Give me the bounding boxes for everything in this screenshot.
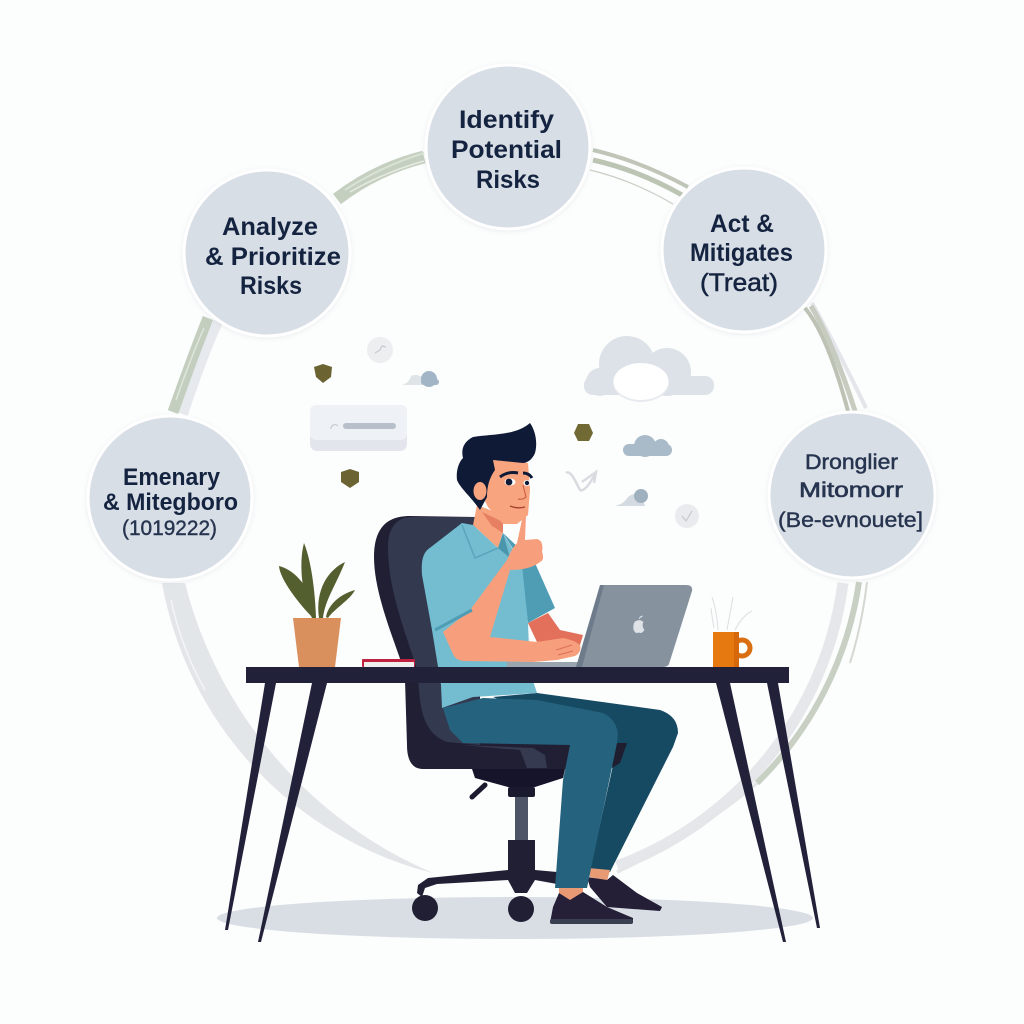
shirt body xyxy=(422,523,537,708)
step circle: analyze and prioritize risks: Risks xyxy=(240,272,302,300)
ring arc: outer thin line xyxy=(850,582,867,663)
seat lever xyxy=(472,785,485,797)
leaves xyxy=(279,543,355,618)
step circle: dronglier re-evaluate xyxy=(769,412,935,578)
ring arc: lower right gray xyxy=(617,583,843,866)
far arm xyxy=(528,613,583,645)
floating icons xyxy=(310,336,714,528)
step circle: analyze and prioritize risks xyxy=(184,170,350,336)
icon: check arrow xyxy=(566,472,596,490)
hair xyxy=(457,423,536,510)
laptop screen xyxy=(582,585,692,667)
step circle: identify potential risks: Risks xyxy=(476,166,540,194)
cycle ring xyxy=(162,150,867,873)
neck xyxy=(473,505,503,548)
steam xyxy=(711,597,752,630)
icon: laptop logo xyxy=(634,616,644,633)
desk leg near left xyxy=(258,683,327,942)
step circle: emenary and mitegboro xyxy=(88,416,252,580)
ring arc: analyze to identify xyxy=(337,153,424,199)
step circle: dronglier re-evaluate: Mitomorr xyxy=(799,479,903,502)
step circle: act and mitigates: (Treat) xyxy=(700,269,778,297)
shoe sole xyxy=(550,919,633,924)
raised hand xyxy=(507,514,543,570)
icon: notification card xyxy=(310,405,407,451)
collar inner xyxy=(498,533,510,558)
step circle: emenary and mitegboro: (1019222) xyxy=(122,517,217,540)
person xyxy=(422,423,678,924)
step circle: act and mitigates xyxy=(662,168,826,332)
step circle: act and mitigates: Act & xyxy=(710,210,774,238)
chair base arms xyxy=(417,870,557,897)
icon: small cloud right xyxy=(615,489,648,506)
mug body xyxy=(713,632,739,667)
chair back cushion xyxy=(388,517,480,745)
laptop edge xyxy=(576,585,608,667)
eyebrows xyxy=(500,472,532,478)
ring arc: identify to act xyxy=(590,150,688,204)
desk leg near right xyxy=(716,683,786,942)
seat underside xyxy=(472,769,565,787)
book xyxy=(362,659,415,667)
sleeve hem xyxy=(435,610,472,630)
neck shadow xyxy=(482,512,503,533)
collar xyxy=(462,525,498,558)
potted plant xyxy=(279,543,355,667)
caster left xyxy=(412,895,438,921)
seat cushion edge xyxy=(460,745,547,768)
far ankle xyxy=(588,868,610,881)
base column xyxy=(508,840,535,880)
floor shadow xyxy=(217,897,813,939)
chair back and seat shell xyxy=(374,516,573,769)
near arm xyxy=(443,560,580,662)
ring arc: act to reevaluate xyxy=(805,303,866,411)
seat collar xyxy=(508,787,535,797)
step circle: identify potential risks: Potential xyxy=(451,136,562,164)
desk xyxy=(225,667,820,942)
icon: badge left lower xyxy=(341,469,359,488)
ring arc: lower left xyxy=(162,583,433,873)
laptop base xyxy=(507,662,578,667)
step circle: emenary and mitegboro: Emenary xyxy=(123,464,221,491)
icon: cloud right xyxy=(623,435,672,457)
desk top xyxy=(246,667,789,683)
step circle: dronglier re-evaluate: (Be-evnouete] xyxy=(778,509,923,532)
ring arc: emergency to analyze xyxy=(173,318,218,414)
desk leg far right xyxy=(767,683,820,928)
ring arc: lower right tail xyxy=(617,783,757,872)
step circle: analyze and prioritize risks: & Prioritize xyxy=(205,243,341,271)
laptop xyxy=(507,585,692,667)
far leg xyxy=(493,693,678,872)
eyes xyxy=(504,478,530,486)
icon: badge left upper xyxy=(314,364,332,383)
icon: large cloud xyxy=(584,336,714,402)
step circle: act and mitigates: Mitigates xyxy=(690,239,793,267)
icon: badge center xyxy=(574,424,593,441)
near shoe xyxy=(550,892,633,923)
coffee mug xyxy=(711,597,752,667)
desk leg far left xyxy=(225,683,276,930)
near leg xyxy=(443,698,618,888)
nose xyxy=(518,485,526,499)
pot xyxy=(293,618,341,667)
step circle: identify potential risks xyxy=(426,65,590,229)
face xyxy=(482,460,530,524)
mouth xyxy=(510,506,525,508)
icon: small cloud left xyxy=(402,371,439,387)
step circle: identify potential risks: Identify xyxy=(459,106,554,134)
step circle: analyze and prioritize risks: Analyze xyxy=(222,213,318,241)
mug handle xyxy=(734,640,750,656)
icon: check circle right xyxy=(675,504,699,528)
chair side piece xyxy=(612,743,627,768)
icon: check circle top left xyxy=(367,337,393,363)
caster center xyxy=(508,896,534,922)
ring arc: lower right green xyxy=(757,582,859,783)
far sleeve xyxy=(503,533,555,623)
ear xyxy=(474,482,486,500)
office chair xyxy=(374,516,573,922)
mug shaded side xyxy=(734,632,739,667)
far shoe xyxy=(587,875,662,911)
gas lift post xyxy=(515,797,528,840)
step circle: emenary and mitegboro: & Mitegboro xyxy=(103,489,238,516)
finger lines xyxy=(556,645,573,655)
step circle: dronglier re-evaluate: Dronglier xyxy=(805,451,898,474)
near ankle xyxy=(559,888,583,900)
